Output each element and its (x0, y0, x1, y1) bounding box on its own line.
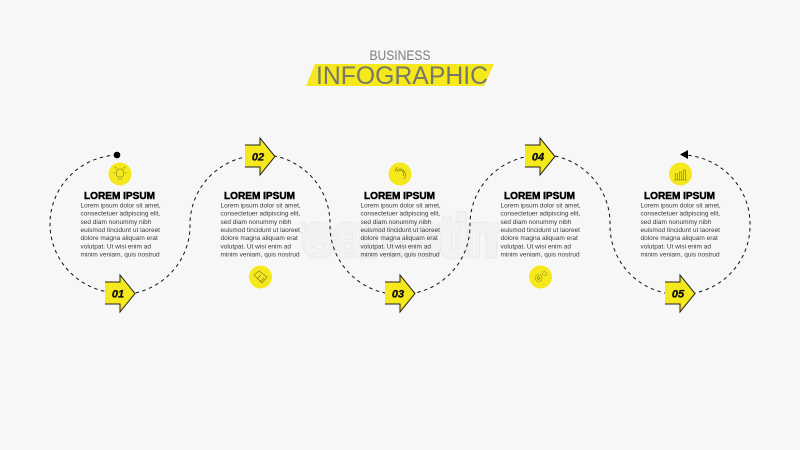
body 5: consectetuer adipiscing elit, (640, 211, 721, 218)
body 3: consectetuer adipiscing elit, (360, 211, 441, 218)
body 4: volutpat. Ut wisi enim ad (500, 243, 571, 250)
heading 5: LOREM IPSUM (644, 191, 715, 202)
arrow 04: 04 (532, 152, 544, 164)
body 5: dolore magna aliquam erat (640, 235, 718, 242)
body 2: dolore magna aliquam erat (220, 235, 298, 242)
body 2: Lorem ipsum dolor sit amet, (220, 202, 301, 210)
heading 1: LOREM IPSUM (84, 191, 155, 202)
arrow 01 (105, 275, 135, 312)
watermark: dreamstime (253, 204, 546, 267)
body 4: dolore magna aliquam erat (500, 235, 578, 242)
title (306, 48, 494, 90)
body 3: dolore magna aliquam erat (360, 235, 438, 242)
step 1 (80, 162, 161, 312)
body 3: sed diam nonummy nibh (360, 219, 432, 226)
arrow 03: 03 (392, 288, 404, 300)
icon: bar chart (669, 162, 692, 186)
watermark: dreamstime (253, 204, 546, 267)
body 5: volutpat. Ut wisi enim ad (640, 243, 711, 250)
end arrowhead (680, 150, 688, 159)
step 4 (500, 138, 581, 288)
body 2: euismod tincidunt ut laoreet (220, 227, 300, 234)
body 3: euismod tincidunt ut laoreet (360, 227, 440, 234)
body 4: Lorem ipsum dolor sit amet, (500, 202, 581, 210)
step 5 (640, 162, 721, 312)
body 4: euismod tincidunt ut laoreet (500, 227, 580, 234)
arrow 03 (385, 275, 415, 312)
start dot (114, 152, 120, 158)
title small line: BUSINESS (370, 48, 430, 63)
body 1: dolore magna aliquam erat (80, 235, 158, 242)
icon: handshake (249, 266, 272, 288)
body 4: sed diam nonummy nibh (500, 219, 572, 226)
body 2: sed diam nonummy nibh (220, 219, 292, 226)
title highlight (306, 64, 494, 86)
body 2: minim veniam, quis nostrud (220, 252, 300, 258)
body 3: Lorem ipsum dolor sit amet, (360, 202, 441, 210)
body 1: minim veniam, quis nostrud (80, 252, 160, 258)
body 5: sed diam nonummy nibh (640, 219, 712, 226)
arrow 05 (665, 275, 695, 312)
watermark (300, 211, 500, 259)
arrow 05: 05 (672, 288, 685, 300)
body 5: minim veniam, quis nostrud (640, 252, 720, 258)
body 1: volutpat. Ut wisi enim ad (80, 243, 151, 250)
heading 3: LOREM IPSUM (364, 191, 435, 202)
body 5: Lorem ipsum dolor sit amet, (640, 202, 721, 210)
body 3: volutpat. Ut wisi enim ad (360, 243, 431, 250)
watermark: dreamstime (253, 204, 546, 267)
arrow 01: 01 (112, 288, 124, 300)
icon: target swirl (388, 162, 412, 186)
title main line: INFOGRAPHIC (316, 62, 488, 90)
body 1: consectetuer adipiscing elit, (80, 211, 161, 218)
step 2 (220, 138, 301, 288)
watermark: dreamstime (253, 204, 546, 267)
body 4: minim veniam, quis nostrud (500, 252, 580, 258)
body 2: consectetuer adipiscing elit, (220, 211, 301, 218)
body 1: sed diam nonummy nibh (80, 219, 152, 226)
arrow 02: 02 (252, 152, 264, 164)
icon: light bulb (108, 162, 132, 186)
arrow 02 (245, 138, 275, 175)
step 3 (360, 162, 441, 312)
icon: gears (529, 266, 552, 288)
body 1: euismod tincidunt ut laoreet (80, 227, 160, 234)
heading 4: LOREM IPSUM (504, 191, 575, 202)
body 4: consectetuer adipiscing elit, (500, 211, 581, 218)
body 1: Lorem ipsum dolor sit amet, (80, 202, 161, 210)
heading 2: LOREM IPSUM (224, 191, 295, 202)
body 3: minim veniam, quis nostrud (360, 252, 440, 258)
dashed connector path (50, 155, 750, 293)
body 2: volutpat. Ut wisi enim ad (220, 243, 291, 250)
body 5: euismod tincidunt ut laoreet (640, 227, 720, 234)
arrow 04 (525, 138, 555, 175)
